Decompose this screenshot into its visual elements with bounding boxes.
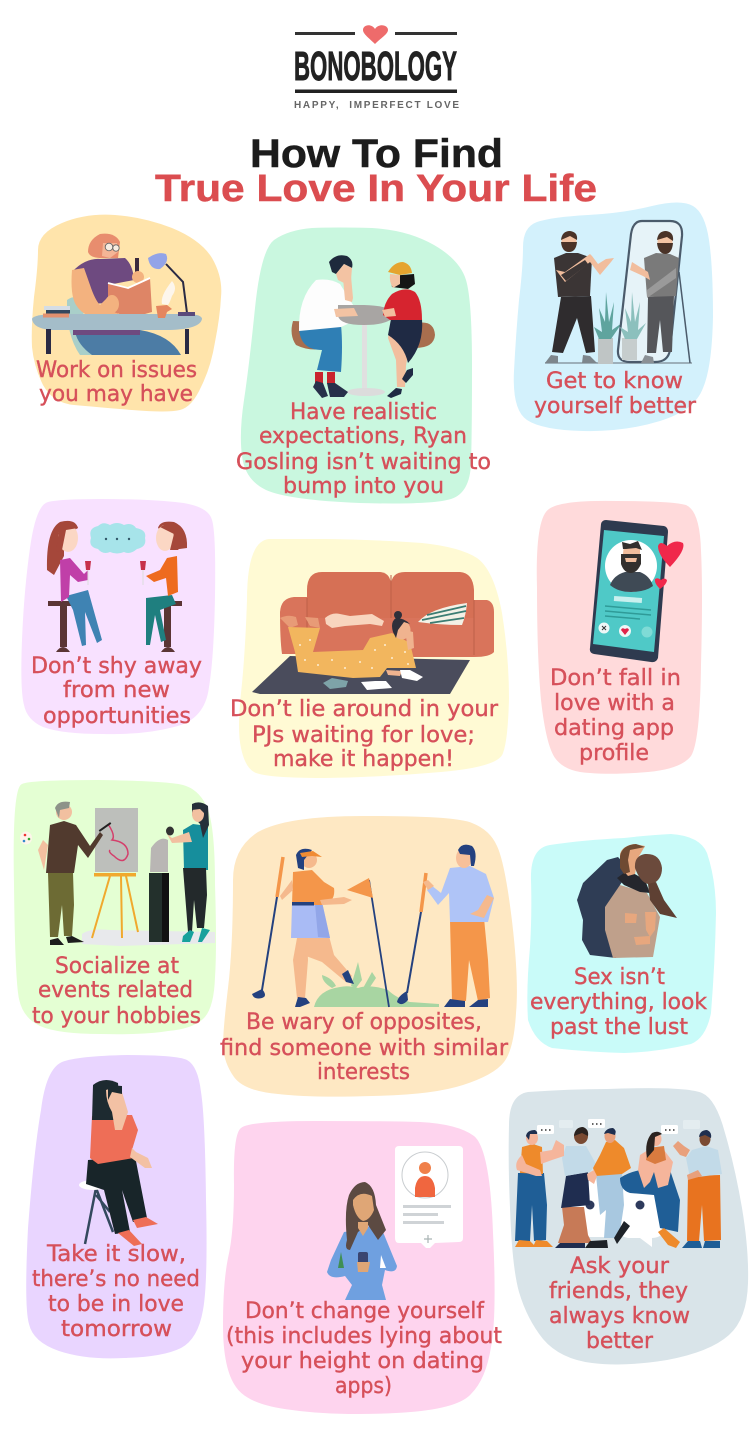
caption: Sex isn’t (574, 964, 665, 990)
caption: Don’t change yourself (245, 1298, 485, 1324)
caption: yourself better (534, 393, 697, 419)
caption: Have realistic (290, 399, 437, 425)
caption: always know (549, 1303, 690, 1329)
caption: bump into you (283, 473, 444, 499)
caption: Take it slow, (46, 1241, 186, 1267)
panel: sex isn't everything (527, 834, 716, 1053)
caption: better (586, 1328, 654, 1354)
caption: everything, look (530, 989, 707, 1015)
title: True Love In Your Life (155, 168, 597, 210)
panel: socialize at events (14, 780, 216, 1034)
caption: find someone with similar (220, 1035, 509, 1061)
logo: Bonobology: BONOBOLOGY (294, 43, 457, 89)
caption: make it happen! (273, 746, 454, 772)
panel: be wary of opposites (220, 816, 517, 1097)
caption: to your hobbies (32, 1003, 201, 1029)
illustration: dating app phone with hearts (590, 520, 683, 662)
panel: ask your friends (509, 1088, 748, 1364)
icon: speech bubbles (537, 1119, 700, 1134)
panel: get to know yourself (514, 202, 713, 431)
caption: past the lust (550, 1014, 688, 1040)
logo: Bonobology (294, 25, 459, 111)
panel: new opportunities (21, 499, 215, 734)
caption (236, 399, 491, 499)
caption (226, 1298, 502, 1399)
icon: profile card (395, 1146, 463, 1248)
caption: there’s no need (32, 1266, 200, 1292)
caption: Don’t shy away (31, 653, 202, 679)
illustration: two women talking over wine (47, 521, 187, 652)
caption: Don’t fall in (550, 665, 681, 691)
caption (549, 1253, 690, 1354)
caption: expectations, Ryan (259, 423, 467, 449)
illustration: man facing a mirror (545, 221, 692, 364)
caption (36, 357, 197, 407)
caption: events related (38, 977, 193, 1003)
caption: your height on dating (241, 1348, 484, 1374)
caption: friends, they (549, 1278, 688, 1304)
caption: to be in love (48, 1291, 184, 1317)
caption: Don’t lie around in your (230, 696, 499, 722)
caption: opportunities (43, 703, 191, 729)
panel: don't change yourself (223, 1121, 502, 1414)
caption (32, 953, 201, 1029)
caption: (this includes lying about (226, 1323, 502, 1349)
caption: interests (317, 1059, 410, 1085)
illustration: group of friends chatting (515, 1119, 722, 1248)
illustration: painter and sculptor (20, 802, 215, 946)
caption: you may have (39, 381, 193, 407)
panel: realistic expectations (236, 228, 491, 504)
caption: profile (579, 740, 649, 766)
caption: tomorrow (61, 1316, 172, 1342)
caption: dating app (554, 715, 674, 741)
caption (31, 653, 202, 729)
panel: dating app profile (537, 501, 702, 774)
illustration: seated woman thinking (79, 1080, 158, 1246)
caption: PJs waiting for love; (252, 722, 475, 748)
illustration: couple embracing (577, 844, 677, 958)
title (155, 132, 597, 210)
caption (550, 665, 681, 766)
caption: apps) (335, 1373, 392, 1399)
caption (220, 1009, 509, 1085)
illustration: golfers (252, 845, 494, 1007)
illustration: couple at a cafe table (292, 255, 435, 398)
illustration: woman in pyjamas on rug by sofa (252, 572, 494, 694)
caption: Work on issues (36, 357, 197, 383)
caption: love with a (554, 690, 675, 716)
caption: from new (63, 677, 170, 703)
caption: Be wary of opposites, (246, 1009, 482, 1035)
caption (230, 696, 499, 772)
panel: work on issues (32, 215, 221, 412)
caption: Gosling isn’t waiting to (236, 449, 491, 475)
panel: take it slow (26, 1055, 207, 1358)
caption (32, 1241, 200, 1342)
caption: Get to know (546, 368, 683, 394)
caption (534, 368, 697, 419)
caption (530, 964, 707, 1040)
title: How To Find (250, 132, 503, 176)
logo: Bonobology: HAPPY, IMPERFECT LOVE (294, 100, 459, 111)
caption: Ask your (570, 1253, 670, 1279)
icon: heart (363, 25, 388, 44)
illustration: person writing at a desk (32, 234, 202, 355)
caption: Socialize at (55, 953, 179, 979)
illustration: woman with phone and profile card (327, 1146, 463, 1300)
panel: don't lie around (230, 539, 509, 778)
